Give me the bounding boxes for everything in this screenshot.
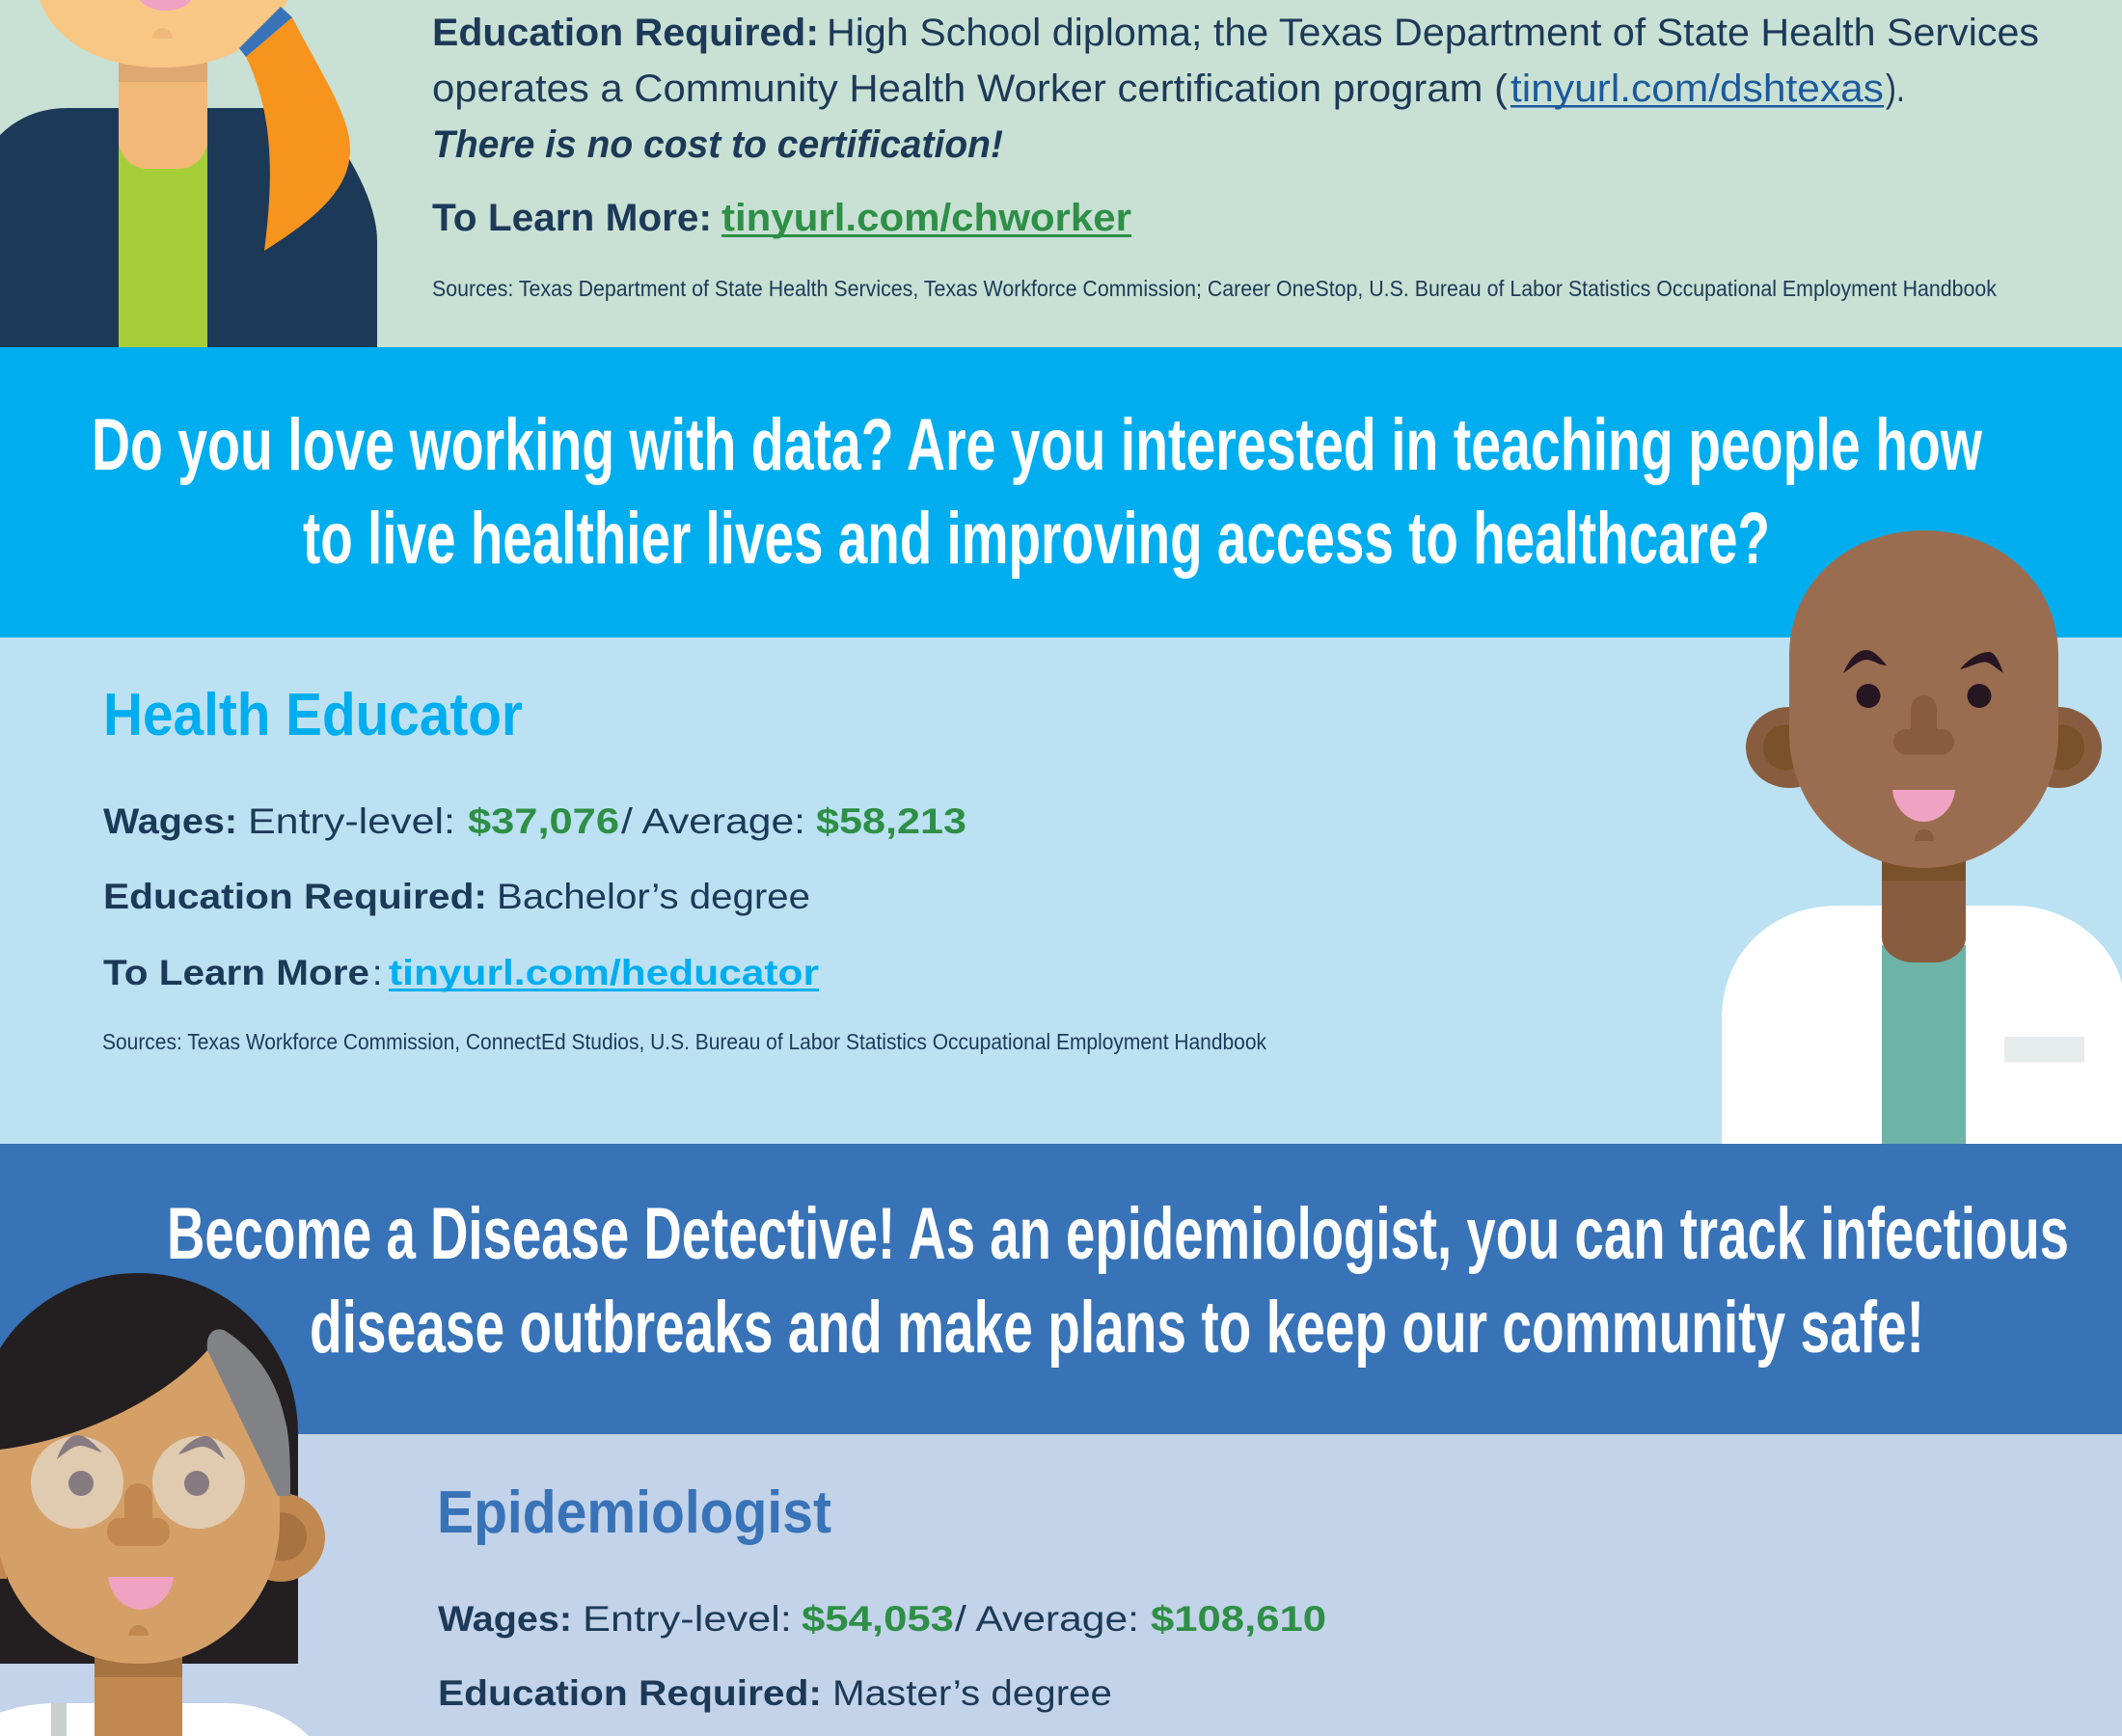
- text: education required for community health worker: High School diploma; the Texas Department of State Health Services: [827, 12, 2039, 54]
- text: health educator wages: Wages:: [103, 801, 237, 841]
- text: learn more link: [432, 197, 1131, 239]
- text: epidemiologist wages: / Average:: [955, 1599, 1139, 1639]
- panel: health educator banner: [0, 347, 2122, 637]
- text: epidemiologist wages: $54,053: [802, 1599, 954, 1639]
- text: health educator education: Education Required:: [103, 877, 487, 916]
- text: epidemiologist wages: Wages:: [438, 1599, 572, 1639]
- text: education required for community health worker: ).: [1886, 68, 1905, 110]
- text: health educator wages: [103, 801, 966, 841]
- text: education required for community health worker: operates a Community Health Worker certification program (: [432, 68, 1509, 110]
- text: education required for community health worker: There is no cost to certification!: [432, 123, 1003, 166]
- text: health educator learn more: [103, 953, 819, 992]
- heading: health educator: Health Educator: [103, 682, 523, 748]
- text: health educator wages: / Average:: [621, 801, 805, 841]
- text: education required for community health worker: Education Required:: [432, 12, 819, 54]
- illustration: community health worker: [0, 0, 377, 347]
- panel: community health worker details: [0, 0, 2122, 347]
- text: epidemiologist wages: Entry-level:: [583, 1599, 792, 1639]
- text: epidemiologist education: Education Required:: [438, 1673, 822, 1713]
- text: learn more link: To Learn More:: [432, 197, 712, 239]
- text: health educator wages: $58,213: [816, 801, 966, 841]
- text: epidemiologist wages: $108,610: [1151, 1599, 1326, 1639]
- text: sources: Sources: Texas Department of State Health Services, Texas Workforce Commission; Career OneStop, U.S. Bureau of Labor Statistics Occupational Employment Handbook: [432, 276, 1997, 301]
- text: health educator learn more: tinyurl.com/heducator: [389, 953, 819, 992]
- text: epidemiologist education: Master’s degree: [832, 1673, 1112, 1713]
- text: health educator education: [103, 877, 810, 916]
- text: health educator learn more: To Learn More: [103, 953, 369, 992]
- text: epidemiologist wages: [438, 1599, 1326, 1639]
- illustration: health educator: [1722, 530, 2122, 1144]
- text: health educator wages: $37,076: [468, 801, 619, 841]
- text: learn more link: tinyurl.com/chworker: [721, 197, 1131, 239]
- panel: epidemiologist banner: [0, 1144, 2122, 1434]
- text: health educator learn more: :: [372, 953, 382, 992]
- text: health educator wages: Entry-level:: [248, 801, 455, 841]
- text: health educator education: Bachelor’s degree: [497, 877, 810, 916]
- text: epidemiologist education: [438, 1673, 1112, 1713]
- text: education required for community health worker: [432, 12, 2039, 166]
- text: education required for community health worker: tinyurl.com/dshtexas: [1510, 68, 1884, 110]
- text: health educator sources: Sources: Texas Workforce Commission, ConnectEd Studios, U.S. Bureau of Labor Statistics Occupational Employment Handbook: [102, 1029, 1266, 1054]
- panel: health educator details: [0, 637, 2122, 1144]
- heading: epidemiologist: Epidemiologist: [437, 1479, 831, 1546]
- illustration: epidemiologist: [0, 1273, 325, 1736]
- panel: epidemiologist details: [0, 1434, 2122, 1736]
